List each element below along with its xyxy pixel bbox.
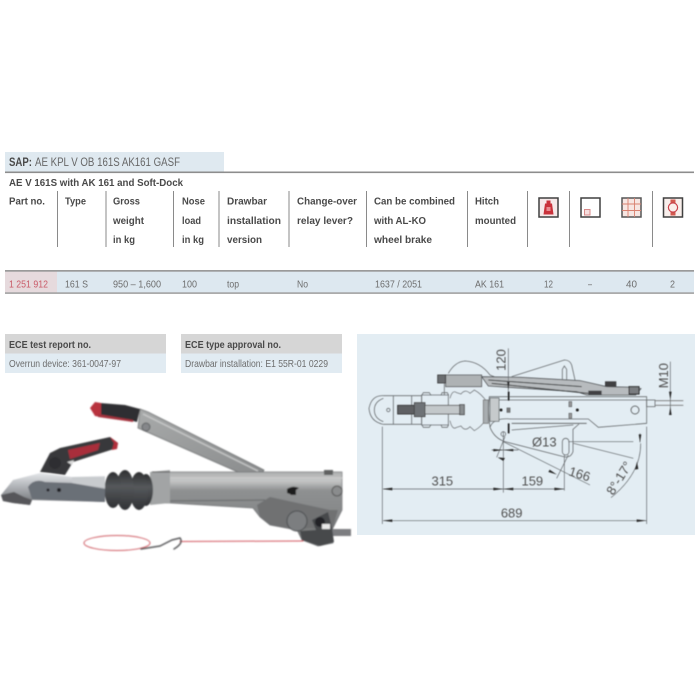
table title: AE V 161S with AK 161 and Soft-Dock: [9, 177, 183, 189]
data row: 40: [626, 278, 637, 290]
keyhole slot: [287, 487, 299, 495]
dimension labels: 315: [431, 474, 453, 489]
dimension labels: 166: [567, 464, 592, 484]
icon: watch: [664, 198, 682, 217]
drawbar body: [489, 392, 647, 433]
data row: [5, 270, 694, 294]
data row: 1 251 912: [9, 278, 48, 290]
data row: 161 S: [65, 278, 88, 290]
coupling head: [1, 473, 105, 505]
ring: [332, 486, 342, 496]
panel: ECE test report: [5, 334, 166, 373]
brake lever arm: [138, 409, 264, 474]
column headers: wheel brake: [373, 234, 432, 246]
safety cable: [84, 536, 303, 550]
data table: [5, 172, 694, 294]
data row: top: [227, 278, 239, 290]
column headers: Part no.: [9, 196, 45, 208]
column headers: weight: [112, 215, 144, 227]
column headers: Type: [65, 196, 86, 208]
technical drawing: [369, 348, 683, 524]
collar: [150, 470, 170, 505]
icon: gross weight: [539, 198, 558, 217]
brake mechanism: [287, 511, 334, 546]
slot hole: [562, 438, 569, 455]
tow rod: [647, 400, 655, 407]
bellows: [104, 470, 153, 510]
dimension lines: [382, 348, 670, 524]
coupling handle: [40, 437, 118, 475]
column headers: Can be combined: [374, 196, 455, 208]
panel: ECE test report: ECE test report no.: [9, 339, 91, 351]
panel: ECE type approval: [181, 334, 342, 373]
icon: small square: [581, 198, 600, 217]
panel: dimension drawing: [357, 334, 695, 535]
top bolt: [324, 470, 333, 475]
lower bracket: [490, 424, 579, 457]
data row: –: [588, 278, 592, 290]
upper lever: [438, 360, 641, 395]
column headers: Hitch: [475, 196, 499, 208]
dimension labels: [431, 349, 671, 520]
column headers: in kg: [182, 234, 204, 246]
SAP heading: SAP:: [9, 155, 32, 169]
column headers: in kg: [113, 234, 135, 246]
column headers: with AL-KO: [373, 215, 426, 227]
column headers: mounted: [475, 215, 516, 227]
SAP heading: [5, 152, 224, 172]
column headers: Change-over: [297, 196, 357, 208]
photo: overrun hitch: [1, 402, 351, 550]
column headers: Drawbar: [227, 196, 267, 208]
column headers: load: [182, 215, 201, 227]
dimension labels: 689: [501, 505, 523, 520]
icon: grid: [622, 198, 641, 217]
bellows outline: [450, 390, 487, 431]
column headers: [9, 196, 516, 246]
data row: 12: [544, 278, 553, 290]
panel: ECE type approval: ECE type approval no.: [185, 339, 281, 351]
column headers: installation: [227, 215, 281, 227]
column headers: version: [227, 234, 262, 246]
tow rod: [330, 529, 351, 536]
data row: 2: [670, 278, 675, 290]
column headers: Nose: [182, 196, 205, 208]
panel: ECE type approval: Drawbar installation: E1 55R-01 0229: [185, 358, 328, 370]
data row: 1637 / 2051: [375, 278, 422, 290]
data row: AK 161: [475, 278, 504, 290]
arrowheads: [382, 382, 672, 522]
housing: [152, 472, 342, 546]
column headers: relay lever?: [297, 215, 353, 227]
data row: 100: [182, 278, 197, 290]
dimension labels: 159: [521, 474, 543, 489]
column headers: Gross: [113, 196, 140, 208]
data row: 950 – 1,600: [113, 278, 161, 290]
dimension labels: Ø13: [532, 435, 557, 450]
panel: ECE test report: Overrun device: 361-0047-97: [9, 358, 121, 370]
SAP heading: AE KPL V OB 161S AK161 GASF: [35, 155, 180, 169]
dimension labels: M10: [656, 363, 671, 388]
dimension labels: 8°-17°: [603, 459, 635, 498]
coupling outline: [369, 393, 464, 427]
data row: No: [297, 278, 308, 290]
lever grip: [90, 402, 140, 422]
dimension labels: 120: [493, 349, 508, 371]
